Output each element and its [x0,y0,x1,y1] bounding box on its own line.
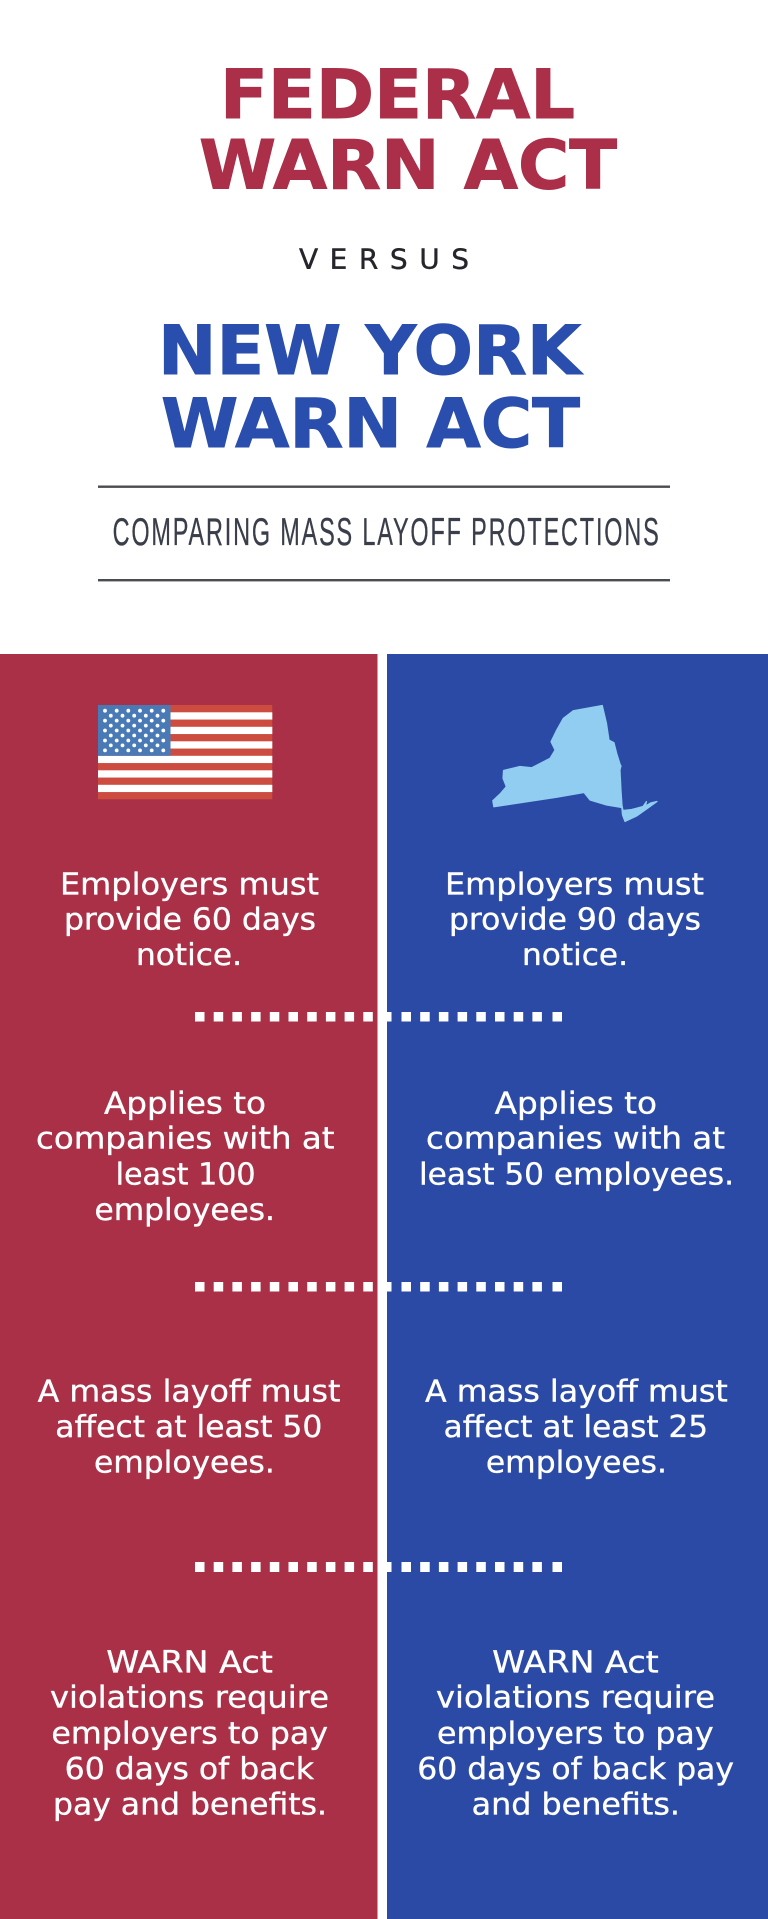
text: new york employer size: least 50 employees. [419,1157,734,1192]
text: new york mass layoff threshold: affect at least 25 [444,1410,708,1445]
text: new york notice period: notice. [522,938,628,973]
text: federal mass layoff threshold: affect at least 50 [55,1410,322,1445]
text: new york violations penalty: employers to pay [437,1716,714,1751]
panel: new york [387,654,768,1919]
text: new york notice period [445,867,704,973]
text: new york employer size: companies with at [426,1122,725,1157]
text: federal violations penalty: pay and benefits. [53,1787,327,1822]
text: new york mass layoff threshold: A mass layoff must [425,1375,728,1410]
text: federal notice period: notice. [136,938,242,973]
versus label: VERSUS [299,242,469,276]
icon: New York state map [493,706,657,822]
text: new york mass layoff threshold: employees. [486,1446,667,1481]
text: federal notice period: Employers must [60,867,319,902]
title: New York WARN Act: NEW YORK [158,312,583,391]
text: new york violations penalty: and benefits. [472,1787,680,1822]
text: new york notice period: provide 90 days [449,902,701,938]
text: federal violations penalty: WARN Act [106,1645,273,1680]
text: new york employer size: Applies to [495,1086,657,1121]
text: federal employer size: companies with at [36,1122,335,1157]
text: new york violations penalty: WARN Act [492,1645,659,1680]
text: federal violations penalty: violations require [50,1681,329,1716]
text: new york violations penalty: 60 days of back pay [417,1752,734,1787]
text: federal mass layoff threshold: A mass layoff must [38,1375,341,1410]
title: Federal WARN Act: FEDERAL [220,56,575,135]
icon: US flag [98,705,272,799]
text: new york employer size [419,1086,734,1192]
text: federal mass layoff threshold: employees. [94,1446,275,1481]
text: federal violations penalty: employers to pay [51,1716,328,1751]
title: Federal WARN Act [199,56,618,206]
text: new york mass layoff threshold [425,1375,728,1481]
text: federal employer size: Applies to [104,1086,266,1121]
text: federal mass layoff threshold [38,1375,341,1481]
text: new york violations penalty [417,1645,734,1822]
text: federal employer size: employees. [94,1193,275,1228]
title: New York WARN Act [158,312,583,464]
text: federal violations penalty [50,1645,329,1822]
text: new york notice period: Employers must [445,867,704,902]
text: federal notice period [60,867,319,973]
panel: federal [0,654,378,1919]
title: Federal WARN Act: WARN ACT [199,126,618,206]
title: New York WARN Act: WARN ACT [161,385,581,464]
text: new york violations penalty: violations require [436,1681,715,1716]
text: federal notice period: provide 60 days [64,902,316,938]
text: federal employer size [36,1086,335,1228]
text: federal employer size: least 100 [116,1157,256,1192]
text: federal violations penalty: 60 days of back [65,1752,315,1787]
